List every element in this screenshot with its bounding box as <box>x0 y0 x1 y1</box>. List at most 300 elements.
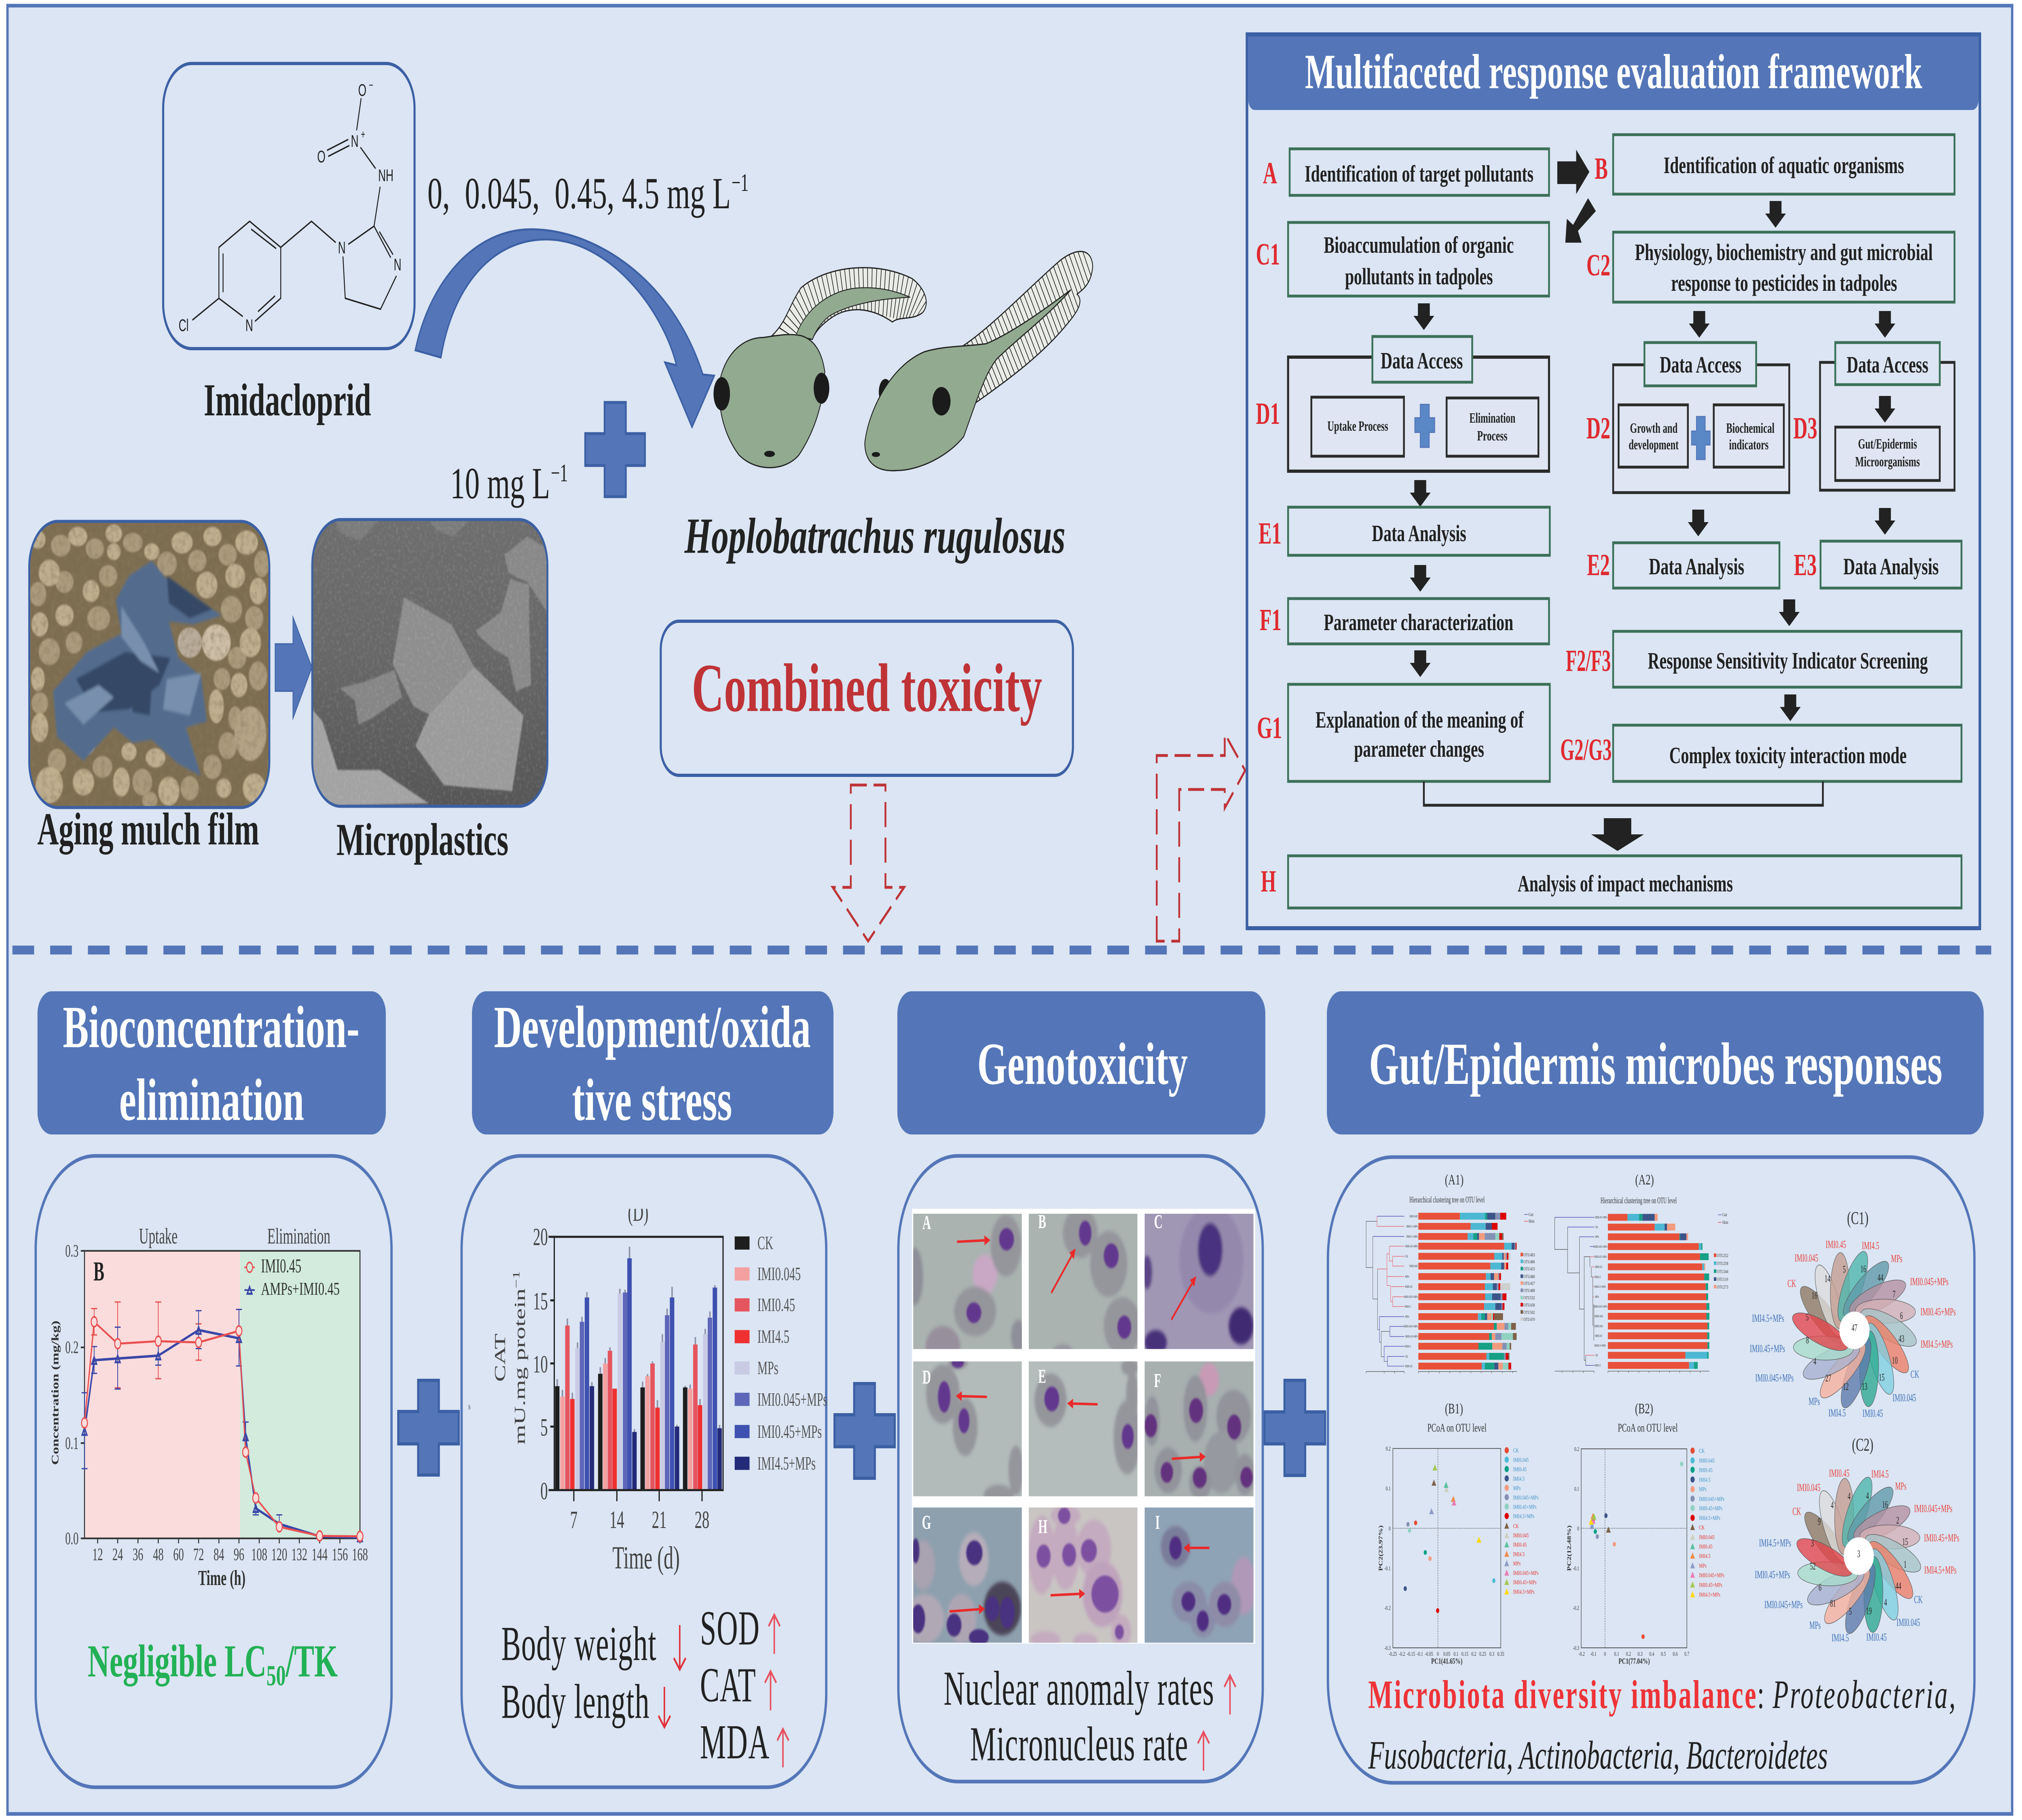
icon: molecule of imidacloprid: + <box>361 127 365 141</box>
step E2: E2 <box>1587 548 1610 582</box>
step D2: indicators <box>1729 437 1768 453</box>
chart C2: flower Venn diagram: IMI0.045+MPs <box>1764 1599 1803 1610</box>
bar chart: CAT activity: 15 <box>533 1287 548 1315</box>
step A <box>1263 149 1549 195</box>
line chart: concentration over time: Elimination <box>267 1224 330 1249</box>
chart B1: PCoA scatter: -0.1 <box>1384 1565 1391 1572</box>
chart A1: clustering tree with stacked bars: MPs <box>1405 1315 1409 1318</box>
dose label: imidacloprid concentrations: −1 <box>732 169 749 197</box>
step B: B <box>1595 151 1608 186</box>
line chart: concentration over time: AMPs+IMI0.45 <box>261 1279 340 1299</box>
chart C1: flower Venn diagram: IMI0.45 <box>1826 1238 1846 1251</box>
step F1: Parameter characterization <box>1324 609 1513 635</box>
chart B2: PCoA scatter: IMI0.045 <box>1699 1457 1715 1464</box>
chart B1: PCoA scatter: -0.05 <box>1425 1651 1433 1657</box>
chart A2: clustering tree with stacked bars: (A2) <box>1635 1172 1654 1188</box>
icon: blue plus <box>585 402 645 497</box>
caption: aging mulch film: Aging mulch film <box>37 804 259 855</box>
step C2: C2 <box>1586 248 1610 282</box>
text block: physiological responses: Body length <box>501 1675 649 1729</box>
step G2/G3 <box>1560 725 1961 781</box>
chart B2: PCoA scatter: MPs <box>1699 1562 1707 1569</box>
step D1: Process <box>1477 428 1507 444</box>
step F1 <box>1260 599 1549 644</box>
step B <box>1595 135 1954 194</box>
chart C1: flower Venn diagram: MPs <box>1891 1253 1902 1265</box>
chart A1: clustering tree with stacked bars: CK <box>1405 1355 1408 1359</box>
chart C1: flower Venn diagram: 44 <box>1878 1272 1883 1283</box>
heading: Bioconcentration-elimination <box>38 991 386 1134</box>
line chart: concentration over time: 84 <box>214 1545 224 1564</box>
chart B1: PCoA scatter: IMI0.45 <box>1513 1541 1527 1548</box>
chart A2: clustering tree with stacked bars: CK <box>1595 1354 1598 1357</box>
micrograph D: D <box>922 1366 931 1388</box>
chart C1: flower Venn diagram: MPs <box>1808 1395 1820 1407</box>
heading: Gut/Epidermis microbes responses: Gut/Epidermis microbes responses <box>1369 1031 1942 1097</box>
step G1: parameter changes <box>1354 736 1484 762</box>
step D3: Microorganisms <box>1855 454 1920 470</box>
chart B1: PCoA scatter: -0.3 <box>1384 1645 1391 1651</box>
chart B1: PCoA scatter: 0.1 <box>1453 1651 1458 1657</box>
arrow: red dashed down arrow <box>833 785 904 941</box>
heading: Imidacloprid: Imidacloprid <box>204 375 371 425</box>
step G2/G3: Complex toxicity interaction mode <box>1669 743 1907 768</box>
micrograph F: F <box>1154 1369 1161 1391</box>
chart A2: clustering tree with stacked bars: Skin <box>1722 1220 1728 1225</box>
icon: molecule of imidacloprid: N <box>338 238 346 257</box>
chart A2: clustering tree with stacked bars: IMI4.5+MPs <box>1595 1285 1606 1289</box>
chart C2: flower Venn diagram: IMI0.045 <box>1797 1481 1821 1494</box>
chart A1: clustering tree with stacked bars: OTU488 <box>1523 1288 1535 1293</box>
line chart: concentration over time <box>49 1224 368 1590</box>
line chart: concentration over time: 108 <box>251 1545 267 1564</box>
chart B1: PCoA scatter: PC1(41.65%) <box>1431 1657 1462 1666</box>
chart A1: clustering tree with stacked bars: IMI0.045+MPs <box>1404 1325 1418 1329</box>
chart B1: PCoA scatter: 0.2 <box>1471 1651 1476 1657</box>
bar chart: CAT activity: 20 <box>533 1223 548 1251</box>
chart A2: clustering tree with stacked bars: IMI4.5 <box>1595 1364 1601 1367</box>
step H: H <box>1261 864 1276 898</box>
chart B2: PCoA scatter: PC2(12.48%) <box>1566 1525 1572 1571</box>
step E3 <box>1794 541 1961 588</box>
caption: species name: Hoplobatrachus rugulosus <box>684 508 1066 564</box>
step D2: Growth and <box>1630 421 1677 436</box>
bar chart: CAT activity: CK <box>757 1233 773 1254</box>
icon: molecule of imidacloprid: O <box>358 81 366 99</box>
step H <box>1261 856 1961 908</box>
text block: physiological responses <box>501 1602 789 1769</box>
chart C2: flower Venn diagram: 9 <box>1818 1516 1821 1527</box>
step E1 <box>1258 507 1550 555</box>
chart B2: PCoA scatter: 0.3 <box>1638 1651 1643 1657</box>
chart A1: clustering tree with stacked bars: IMI0.45 <box>1405 1365 1413 1368</box>
chart C2: flower Venn diagram: 1 <box>1904 1559 1907 1570</box>
chart C1: flower Venn diagram: CK <box>1910 1368 1919 1380</box>
chart B1: PCoA scatter: IMI0.045+MPs <box>1513 1494 1538 1501</box>
chart C1: flower Venn diagram: IMI0.045 <box>1795 1252 1818 1264</box>
chart C1: flower Venn diagram: IMI0.45+MPs <box>1920 1306 1956 1318</box>
callout: combined toxicity: Combined toxicity <box>692 650 1042 726</box>
framework header: Multifaceted response evaluation framework <box>1305 45 1922 99</box>
chart C2: flower Venn diagram: IMI4.5+MPs <box>1924 1564 1956 1576</box>
arrow: B to C2 <box>1765 201 1786 228</box>
chart A1: clustering tree with stacked bars: OTU438 <box>1523 1303 1535 1308</box>
step C2 <box>1586 232 1954 302</box>
arrow: C2 to D2 <box>1689 311 1710 338</box>
arrow: E1 to F1 <box>1410 565 1431 592</box>
chart B2: PCoA scatter <box>1566 1401 1724 1666</box>
micrograph A <box>906 1211 1026 1367</box>
chart C2: flower Venn diagram: IMI0.45+MPs <box>1924 1532 1959 1544</box>
step G1: G1 <box>1257 711 1282 745</box>
bar chart: CAT activity: MPs <box>757 1358 778 1379</box>
text block: genotoxicity rates: Micronucleus rate <box>970 1718 1188 1771</box>
chart C2: flower Venn diagram: 52 <box>1810 1561 1816 1572</box>
chart A1: clustering tree with stacked bars: OTU480 <box>1523 1274 1535 1279</box>
step D1: D1 <box>1256 396 1280 431</box>
step D2: D2 <box>1586 411 1610 445</box>
chart C2: flower Venn diagram: 2 <box>1896 1515 1899 1526</box>
chart C1: flower Venn diagram: 43 <box>1899 1333 1904 1344</box>
text block: physiological responses: CAT <box>700 1659 756 1712</box>
chart C1: flower Venn diagram: 15 <box>1879 1372 1885 1383</box>
step B: Identification of aquatic organisms <box>1664 152 1904 178</box>
chart A2: clustering tree with stacked bars: OTU252 <box>1717 1253 1728 1259</box>
arrow: film to microplastics <box>275 617 312 718</box>
micrograph C: C <box>1154 1211 1163 1233</box>
step E1: Data Analysis <box>1372 521 1466 546</box>
arrow: D3 to E3 <box>1875 508 1895 535</box>
step A: A <box>1263 156 1277 190</box>
chart B1: PCoA scatter: 0.2 <box>1386 1445 1391 1452</box>
text block: physiological responses: Body weight <box>501 1617 656 1671</box>
line chart: concentration over time: 144 <box>312 1545 328 1564</box>
step F1: F1 <box>1260 603 1282 637</box>
chart A1: clustering tree with stacked bars: MPs <box>1405 1275 1409 1278</box>
chart B2: PCoA scatter: 0.1 <box>1614 1651 1619 1657</box>
step F2/F3: F2/F3 <box>1566 643 1611 678</box>
chart B1: PCoA scatter: CK <box>1513 1523 1519 1529</box>
chart B1: PCoA scatter: IMI0.45+MPs <box>1513 1504 1536 1510</box>
text block: genotoxicity rates: Nuclear anomaly rates <box>943 1662 1214 1715</box>
text block: physiological responses: MDA <box>700 1716 769 1769</box>
chart A1: clustering tree with stacked bars: OTU486 <box>1523 1259 1535 1265</box>
micrograph B <box>1029 1208 1141 1357</box>
chart C2: flower Venn diagram: 6 <box>1819 1582 1821 1593</box>
chart B1: PCoA scatter <box>1378 1401 1538 1666</box>
chart C1: flower Venn diagram: 5 <box>1806 1312 1809 1323</box>
chart A1: clustering tree with stacked bars: IMI0.045 <box>1409 1215 1418 1218</box>
micrograph I <box>1144 1507 1256 1643</box>
chart A2: clustering tree with stacked bars <box>1555 1172 1728 1373</box>
arrow: E to F2/F3 <box>1779 599 1800 626</box>
micrograph I: I <box>1155 1511 1160 1533</box>
bar chart: CAT activity: CAT <box>492 1333 509 1382</box>
bar chart: CAT activity: 0 <box>540 1477 548 1505</box>
step C1: C1 <box>1256 237 1280 271</box>
arrow: A to C1 diagonal <box>1565 198 1596 243</box>
chart B1: PCoA scatter: -0.15 <box>1407 1651 1415 1657</box>
chart B1: PCoA scatter: 0.15 <box>1462 1651 1468 1657</box>
line chart: concentration over time: Concentration (mg/kg) <box>49 1321 61 1465</box>
step D3: Data Access <box>1846 352 1929 378</box>
photo: microplastics SEM image <box>312 520 548 806</box>
line chart: concentration over time: 36 <box>133 1545 143 1564</box>
line chart: concentration over time: 60 <box>173 1545 184 1564</box>
chart B2: PCoA scatter: 0.6 <box>1673 1651 1678 1657</box>
chart B2: PCoA scatter: (B2) <box>1635 1401 1653 1417</box>
chart B1: PCoA scatter: 0.1 <box>1386 1485 1391 1492</box>
icon: molecule of imidacloprid: N <box>394 255 402 274</box>
bar chart: CAT activity: 14 <box>609 1506 624 1534</box>
chart A2: clustering tree with stacked bars: IMI0.045+MPs <box>1594 1245 1607 1249</box>
bar chart: CAT activity: IMI0.045+MPs <box>757 1389 827 1410</box>
chart B1: PCoA scatter: CK <box>1513 1447 1519 1454</box>
bar chart: CAT activity: 5 <box>540 1414 548 1441</box>
chart C2: flower Venn diagram: IMI4.5 <box>1871 1468 1889 1480</box>
micrograph grid <box>905 1206 1256 1650</box>
step D1: Elimination <box>1469 411 1515 426</box>
step D3: Gut/Epidermis <box>1858 436 1917 452</box>
step D2: Data Access <box>1660 352 1741 378</box>
line chart: concentration over time: B <box>93 1257 104 1287</box>
chart B2: PCoA scatter: CK <box>1699 1524 1705 1531</box>
photo: aging mulch film <box>29 521 269 809</box>
step D3: D3 <box>1793 411 1817 445</box>
step F2/F3 <box>1566 631 1961 687</box>
chart B2: PCoA scatter: -0.1 <box>1590 1651 1597 1657</box>
chart A1: clustering tree with stacked bars: Hierarchical clustering tree on OTU level <box>1409 1195 1485 1204</box>
micrograph E <box>1029 1359 1141 1496</box>
arrow: red dashed bent arrow <box>1157 734 1245 941</box>
chart C1: flower Venn diagram <box>1750 1208 1956 1419</box>
icon: molecule of imidacloprid: NH <box>378 166 393 185</box>
callout: combined toxicity <box>661 621 1073 775</box>
chart C1: flower Venn diagram: 27 <box>1825 1373 1831 1384</box>
chart C2: flower Venn diagram: 5 <box>1849 1606 1852 1617</box>
chart C2: flower Venn diagram: MPs <box>1809 1619 1821 1631</box>
chart B2: PCoA scatter: -0.2 <box>1578 1651 1585 1657</box>
chart A2: clustering tree with stacked bars: OTU119 <box>1717 1277 1728 1282</box>
chart C2: flower Venn diagram: 19 <box>1866 1606 1872 1617</box>
chart B1: PCoA scatter: IMI0.45+MPs <box>1513 1579 1536 1586</box>
micrograph F <box>1144 1361 1255 1499</box>
heading: Bioconcentration-elimination: Bioconcentration- <box>63 994 360 1060</box>
icon: plus between panels 2 and 3 <box>835 1384 895 1478</box>
bar chart: CAT activity: mU.mg protein <box>512 1289 528 1445</box>
chart A1: clustering tree with stacked bars: IMI4.5 <box>1405 1305 1411 1308</box>
text block: microbiota diversity imbalance: Proteobacteria, <box>1772 1672 1956 1717</box>
chart A1: clustering tree with stacked bars: IMI0.45 <box>1405 1285 1413 1289</box>
step D1: Uptake Process <box>1327 419 1388 434</box>
chart B1: PCoA scatter: (B1) <box>1445 1401 1463 1417</box>
chart B2: PCoA scatter: IMI4.5+MPs <box>1699 1591 1720 1598</box>
text block: microbiota diversity imbalance <box>1368 1672 1956 1778</box>
caption: microplastics: Microplastics <box>336 814 508 865</box>
step D2: Biochemical <box>1726 421 1775 436</box>
chart A2: clustering tree with stacked bars: Hierarchical clustering tree on OTU level <box>1601 1196 1677 1205</box>
chart C2: flower Venn diagram: MPs <box>1895 1480 1906 1492</box>
micrograph H <box>1028 1505 1138 1650</box>
bar chart: CAT activity: IMI4.5+MPs <box>757 1453 816 1474</box>
bar chart: CAT activity: IMI0.045 <box>757 1264 801 1285</box>
chart C2: flower Venn diagram: CK <box>1914 1594 1923 1606</box>
chart A2: clustering tree with stacked bars: OTU258 <box>1717 1261 1728 1266</box>
line chart: concentration over time: 72 <box>193 1545 204 1564</box>
text block: genotoxicity rates <box>943 1662 1236 1771</box>
micrograph B: B <box>1038 1211 1046 1233</box>
chart C2: flower Venn diagram: 3 <box>1811 1538 1814 1549</box>
arrow: F1 to G1 <box>1410 650 1431 677</box>
chart C2: flower Venn diagram: IMI0.45 <box>1829 1467 1849 1479</box>
micrograph A: A <box>922 1211 931 1234</box>
chart A2: clustering tree with stacked bars: IMI0.045 <box>1595 1315 1603 1318</box>
chart C1: flower Venn diagram: IMI4.5+MPs <box>1920 1338 1953 1350</box>
heading: Genotoxicity: Genotoxicity <box>977 1031 1188 1097</box>
chart B2: PCoA scatter: IMI0.045+MPs <box>1699 1572 1724 1579</box>
chart B2: PCoA scatter: 0.2 <box>1574 1446 1579 1452</box>
chart A1: clustering tree with stacked bars: IMI0.045 <box>1409 1265 1418 1268</box>
bracket connector <box>1424 781 1823 805</box>
chart C1: flower Venn diagram: 14 <box>1825 1274 1830 1285</box>
chart C2: flower Venn diagram: 16 <box>1882 1499 1888 1510</box>
chart B1: PCoA scatter: 0.35 <box>1497 1651 1504 1657</box>
chart C1: flower Venn diagram: IMI0.045 <box>1893 1392 1916 1404</box>
tadpole one <box>713 268 929 468</box>
chart A1: clustering tree with stacked bars: IMI0.45+MPs <box>1405 1335 1418 1339</box>
step D1 <box>1256 336 1549 471</box>
text block: microbiota diversity imbalance: : <box>1757 1672 1764 1717</box>
chart C1: flower Venn diagram: 8 <box>1806 1335 1809 1346</box>
chart C1: flower Venn diagram: 13 <box>1862 1381 1868 1392</box>
icon: molecule of imidacloprid: N <box>245 316 253 335</box>
chart C2: flower Venn diagram: IMI0.45+MPs <box>1755 1569 1790 1581</box>
chart B1: PCoA scatter: 0.25 <box>1479 1651 1486 1657</box>
chart B2: PCoA scatter: PC1(77.04%) <box>1618 1657 1650 1666</box>
chart C2: flower Venn diagram: 4 <box>1848 1491 1851 1502</box>
icon: tadpoles <box>713 252 1093 471</box>
chart B1: PCoA scatter: IMI0.45 <box>1513 1466 1527 1473</box>
step G2/G3: G2/G3 <box>1560 732 1612 767</box>
chart B1: PCoA scatter: -0.2 <box>1384 1605 1391 1611</box>
chart C1: flower Venn diagram: 6 <box>1900 1310 1903 1321</box>
chart C2: flower Venn diagram: (C2) <box>1852 1435 1874 1455</box>
chart A1: clustering tree with stacked bars: CK <box>1405 1255 1408 1258</box>
panel: development and oxidative stress <box>461 1156 827 1787</box>
chart A2: clustering tree with stacked bars: IMI0.45 <box>1595 1266 1602 1269</box>
micrograph H: H <box>1038 1515 1047 1537</box>
chart A2: clustering tree with stacked bars: IMI0.045 <box>1595 1325 1603 1328</box>
chart C2: flower Venn diagram: 15 <box>1902 1536 1908 1547</box>
chart B2: PCoA scatter: 0.5 <box>1661 1651 1666 1657</box>
chart A1: clustering tree with stacked bars: OTU457 <box>1523 1281 1535 1286</box>
chart B2: PCoA scatter: IMI0.45 <box>1699 1467 1713 1473</box>
step G1 <box>1257 684 1550 781</box>
icon: plus between panels 3 and 4 <box>1265 1380 1325 1475</box>
chart C1: flower Venn diagram: CK <box>1787 1278 1796 1289</box>
heading: Development/oxidative stress <box>472 991 833 1134</box>
chart C1: flower Venn diagram: 5 <box>1843 1264 1846 1275</box>
panel: genotoxicity <box>899 1156 1263 1782</box>
chart B2: PCoA scatter: 0 <box>1604 1651 1606 1657</box>
chart B2: PCoA scatter: IMI0.045 <box>1699 1534 1715 1541</box>
text block: microbiota diversity imbalance: Microbiota diversity imbalance <box>1368 1672 1756 1717</box>
arrow: curved exposure arrow <box>415 229 714 427</box>
chart C1: flower Venn diagram: IMI0.45 <box>1863 1407 1883 1419</box>
chart B1: PCoA scatter: 0 <box>1437 1651 1439 1657</box>
line chart: concentration over time: IMI0.45 <box>261 1255 301 1277</box>
bar chart: CAT activity: IMI4.5 <box>757 1327 789 1347</box>
chart A2: clustering tree with stacked bars: OTU273 <box>1717 1285 1728 1290</box>
line chart: concentration over time: Uptake <box>139 1224 178 1249</box>
arrow: A to B <box>1557 150 1589 194</box>
panel: multifaceted response evaluation framework <box>1247 34 1980 928</box>
step E1: E1 <box>1258 516 1282 550</box>
chart C1: flower Venn diagram: IMI4.5+MPs <box>1752 1312 1784 1324</box>
bar chart: CAT activity: 7 <box>570 1506 577 1534</box>
bar chart: CAT activity: −1 <box>511 1271 522 1289</box>
chart B2: PCoA scatter: IMI0.45 <box>1699 1543 1713 1550</box>
micrograph G <box>905 1507 1022 1646</box>
chart B1: PCoA scatter: IMI4.5+MPs <box>1513 1589 1534 1595</box>
icon: molecule of imidacloprid: − <box>369 78 373 92</box>
chart C1: flower Venn diagram: IMI4.5 <box>1862 1240 1879 1252</box>
chart B1: PCoA scatter: PCoA on OTU level <box>1428 1422 1487 1434</box>
chart B2: PCoA scatter: -0.1 <box>1573 1565 1579 1572</box>
step E3: Data Analysis <box>1843 554 1939 580</box>
line chart: concentration over time: 96 <box>234 1545 244 1564</box>
heading: Gut/Epidermis microbes responses <box>1327 991 1984 1134</box>
step F2/F3: Response Sensitivity Indicator Screening <box>1648 648 1928 674</box>
arrow: F2/F3 to G2/G3 <box>1780 694 1801 721</box>
chart A1: clustering tree with stacked bars: (A1) <box>1445 1172 1464 1188</box>
bar chart: CAT activity: Time (d) <box>612 1541 680 1576</box>
chart A2: clustering tree with stacked bars: IMI0.45+MPs <box>1594 1255 1607 1259</box>
chart B1: PCoA scatter: IMI4.5 <box>1513 1551 1525 1558</box>
heading: Bioconcentration-elimination: elimination <box>119 1067 304 1133</box>
chart B2: PCoA scatter: PCoA on OTU level <box>1618 1422 1678 1434</box>
chart A1: clustering tree with stacked bars: IMI0.45+MPs <box>1405 1245 1418 1248</box>
chart C2: flower Venn diagram: 4 <box>1866 1491 1869 1502</box>
arrow: C1 to D1 <box>1413 303 1434 330</box>
chart B2: PCoA scatter: 0.4 <box>1649 1651 1654 1657</box>
chart C1: flower Venn diagram: 16 <box>1860 1264 1866 1275</box>
step A: Identification of target pollutants <box>1305 161 1533 187</box>
chart B2: PCoA scatter: IMI0.045+MPs <box>1699 1496 1724 1502</box>
chart B2: PCoA scatter: -0.2 <box>1573 1605 1579 1611</box>
text block: microbiota diversity imbalance: Fusobacteria, Actinobacteria, Bacteroidetes <box>1368 1733 1828 1778</box>
icon: molecule of imidacloprid: O <box>317 148 326 166</box>
arrow: C2 to D3 <box>1875 311 1895 338</box>
chart B1: PCoA scatter: 0.3 <box>1489 1651 1494 1657</box>
chart C1: flower Venn diagram: (C1) <box>1847 1208 1868 1228</box>
chart C2: flower Venn diagram: IMI0.045+MPs <box>1914 1503 1952 1515</box>
step C1: pollutants in tadpoles <box>1345 264 1493 290</box>
chart B1: PCoA scatter: IMI4.5+MPs <box>1513 1513 1534 1519</box>
chart C2: flower Venn diagram: IMI4.5+MPs <box>1759 1537 1791 1549</box>
chart B1: PCoA scatter: -0.2 <box>1399 1651 1405 1657</box>
step E2: Data Analysis <box>1649 554 1744 580</box>
chart B2: PCoA scatter: 0.7 <box>1684 1651 1689 1657</box>
chart C1: flower Venn diagram: 4 <box>1813 1356 1816 1367</box>
chart A1: clustering tree with stacked bars: OTU502 <box>1523 1310 1535 1315</box>
step G1: Explanation of the meaning of <box>1316 707 1524 733</box>
chart B2: PCoA scatter: MPs <box>1699 1486 1707 1492</box>
chart C2: flower Venn diagram: CK <box>1792 1505 1801 1517</box>
chart B1: PCoA scatter: MPs <box>1513 1560 1521 1567</box>
chart B1: PCoA scatter: MPs <box>1513 1485 1521 1492</box>
chart A2: clustering tree with stacked bars: MPs <box>1595 1236 1599 1239</box>
